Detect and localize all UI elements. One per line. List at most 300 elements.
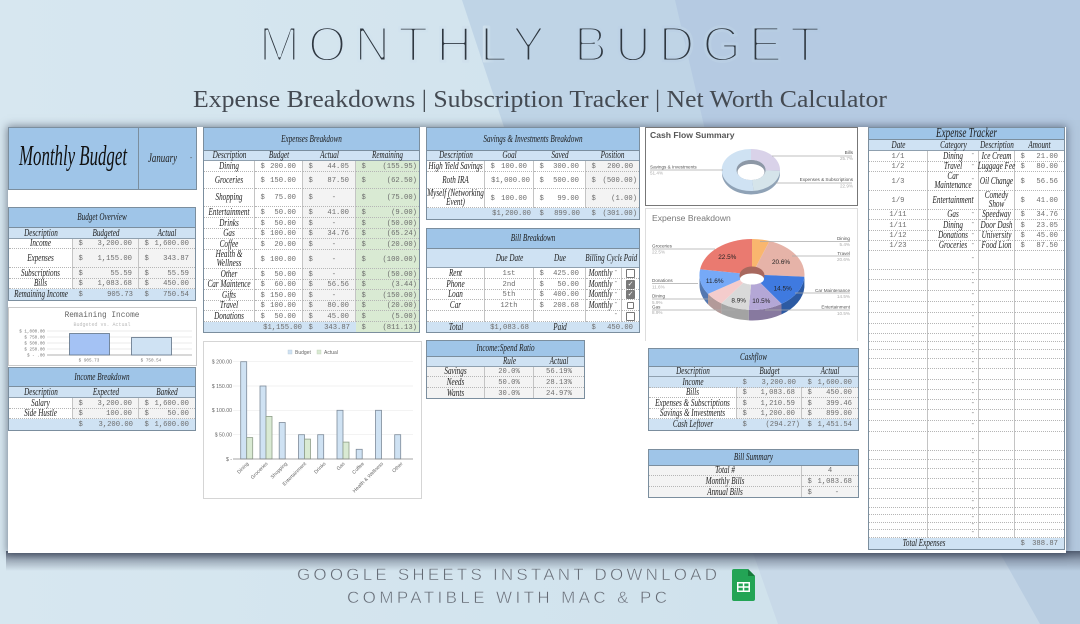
chart: expense breakdown pie: Dining (652, 294, 665, 298)
panel: bill breakdown table: 1st (503, 270, 515, 278)
panel: savings and investments table: Myself (Networking (427, 187, 484, 199)
panel: expenses breakdown table: 343.87 (324, 324, 350, 332)
panel: budget overview table: Income (30, 237, 51, 249)
panel: expenses breakdown table: $1,155.00 (263, 324, 302, 332)
panel: income breakdown table: $ (144, 400, 149, 408)
chart: remaining income: $ - .00 (27, 354, 45, 358)
panel: budget overview table: $ (144, 254, 149, 262)
chart: expense breakdown pie: Entertainment (821, 304, 851, 310)
panel: bill breakdown table: 425.00 (553, 270, 579, 278)
panel: expense tracker table: University (982, 229, 1011, 241)
panel: expenses breakdown table: Wellness (217, 257, 241, 269)
panel: expenses breakdown table: - (332, 270, 336, 278)
panel: expenses breakdown table: (155.95) (382, 162, 417, 170)
chart: expense breakdown pie: Expense Breakdown (652, 213, 731, 223)
panel: expense tracker table: Ice Cream (982, 150, 1011, 162)
panel: expense tracker table: 80.00 (1036, 163, 1058, 171)
panel: expenses breakdown table: Car Maintence (207, 278, 251, 290)
panel: expenses breakdown table: Donations (214, 310, 244, 322)
panel: savings and investments table: Savings & Investments Breakdown (483, 132, 583, 144)
panel: expenses breakdown table: 150.00 (270, 176, 296, 184)
bottom shadow band (6, 551, 1080, 571)
chart: expense breakdown pie: Car Maintenance (815, 288, 850, 293)
panel: savings and investments table: (301.00) (603, 210, 637, 218)
panel: expenses breakdown table: 50.00 (274, 208, 296, 216)
panel: cashflow table: (294.27) (765, 421, 800, 429)
panel: expenses breakdown table: $ (308, 302, 313, 310)
panel: expenses breakdown table: (75.00) (387, 194, 417, 202)
panel: savings and investments table: 200.00 (607, 162, 633, 170)
chart: expense breakdown pie: Travel (837, 251, 850, 256)
panel: savings and investments table: $ (592, 176, 596, 184)
panel: cashflow table: 1,451.54 (817, 421, 852, 429)
panel: income breakdown table: $ (78, 410, 83, 418)
panel: cashflow table: $ (742, 400, 747, 408)
panel: expense tracker table: Description (980, 138, 1014, 150)
chart: expense breakdown pie (645, 208, 858, 341)
panel: expenses breakdown table: (150.00) (382, 292, 417, 300)
panel: expenses breakdown table: $ (308, 208, 313, 216)
chart: cash flow summary donut: 25.7% (840, 156, 853, 161)
chart: expense breakdown pie: 11.6% (706, 278, 724, 285)
panel: expenses breakdown table: $ (362, 162, 366, 170)
panel: budget overview table: $ (144, 291, 149, 299)
panel: bill breakdown table: 208.68 (553, 302, 579, 310)
legend: Actual (324, 350, 338, 356)
panel: expenses breakdown table: 56.56 (327, 281, 349, 289)
panel: bill breakdown table: ✓ (628, 280, 633, 288)
panel: bill breakdown table: $ (540, 302, 544, 310)
panel: cashflow table: 3,200.00 (761, 378, 796, 386)
panel: expenses breakdown table: - (332, 240, 336, 248)
panel: income breakdown table: $ (144, 421, 149, 429)
panel: expense tracker table: 1/9 (892, 196, 904, 204)
panel: bill breakdown table: Paid (553, 320, 567, 332)
chart: budget vs actual bars: Groceries (250, 461, 270, 481)
panel: bill breakdown table: Car (450, 298, 461, 310)
panel: expenses breakdown table: 87.50 (327, 176, 349, 184)
panel: expenses breakdown table: $ (362, 220, 366, 228)
panel: monthly budget banner (8, 127, 197, 190)
chart: expense breakdown pie: 14.5% (837, 294, 850, 299)
panel: budget overview table: $ (78, 254, 83, 262)
panel: budget overview table: 1,600.00 (154, 240, 189, 248)
panel: expenses breakdown table: $ (362, 240, 366, 248)
panel: expense tracker table: 87.50 (1036, 242, 1058, 250)
panel: budget overview table: 55.59 (167, 270, 189, 278)
panel: budget overview table: Remaining Income (14, 288, 68, 300)
panel: expenses breakdown table: $ (308, 194, 313, 202)
panel: savings and investments table: 899.00 (554, 210, 580, 218)
panel: expenses breakdown table: 100.00 (270, 256, 296, 264)
panel: cashflow table: $ (742, 421, 747, 429)
panel: budget overview table: Budget Overview (77, 211, 127, 223)
panel: expense tracker table: 1/1 (892, 152, 904, 160)
chart: remaining income (8, 307, 197, 366)
panel: income breakdown table: Expected (93, 386, 119, 398)
panel: expenses breakdown table: $ (260, 230, 265, 238)
panel: income breakdown table: 3,200.00 (97, 400, 132, 408)
panel: budget overview table: $ (144, 270, 149, 278)
chart: budget vs actual bars: Dining (236, 461, 251, 475)
panel: income spend ratio table: 24.97% (546, 390, 572, 398)
panel: expenses breakdown table: - (332, 220, 336, 228)
panel: cashflow table: 1,600.00 (817, 378, 852, 386)
panel: bill breakdown table: $ (592, 324, 596, 332)
chart: expense breakdown pie: 5.4% (840, 242, 850, 247)
chart: cash flow summary donut (645, 127, 858, 206)
panel: savings and investments table: High Yield Savings (428, 160, 483, 172)
panel: expenses breakdown table: Actual (320, 149, 339, 161)
panel: income breakdown table: 50.00 (167, 410, 189, 418)
panel: savings and investments table: 500.00 (553, 176, 579, 184)
panel: expenses breakdown table: $ (260, 312, 265, 320)
panel: cashflow table: $ (808, 421, 812, 429)
panel: expenses breakdown table: Drinks (219, 216, 239, 228)
panel: budget overview table: Subscriptions (21, 266, 60, 278)
chart: expense breakdown pie: 10.5% (837, 311, 850, 316)
panel: expenses breakdown table: $ (260, 194, 265, 202)
chart: cash flow summary donut: 51.4% (650, 170, 663, 176)
panel: income breakdown table: $ (78, 421, 83, 429)
panel: cashflow table: $ (742, 389, 747, 397)
panel: expenses breakdown table: 200.00 (270, 162, 296, 170)
panel: expenses breakdown table: $ (362, 176, 366, 184)
chart: cash flow summary donut: Expenses & Subscriptions (800, 177, 854, 182)
panel: expenses breakdown table: (3.44) (391, 281, 417, 289)
panel: bill breakdown table: Rent (449, 266, 462, 278)
panel: expenses breakdown table: $ (260, 176, 265, 184)
panel: expenses breakdown table: 50.00 (274, 220, 296, 228)
panel: income breakdown table: Income Breakdown (74, 370, 130, 382)
panel: expense tracker table: $ (1020, 232, 1025, 240)
panel: expenses breakdown table: $ (308, 162, 313, 170)
panel: budget overview table: $ (144, 280, 149, 288)
chart: expense breakdown pie: 10.5% (752, 298, 771, 305)
panel: expenses breakdown table: 50.00 (274, 270, 296, 278)
panel: expenses breakdown table: (20.00) (387, 302, 417, 310)
spreadsheet sheet background (8, 127, 1066, 553)
panel: savings and investments table: $ (490, 162, 495, 170)
panel: income breakdown table: 100.00 (106, 410, 132, 418)
panel: expenses breakdown table: (100.00) (382, 256, 417, 264)
panel: budget overview table: $ (78, 270, 83, 278)
panel: expenses breakdown table: (9.00) (391, 208, 417, 216)
panel: savings and investments table: Description (439, 149, 473, 161)
panel: expense tracker table: $ (1020, 540, 1025, 548)
panel: expense tracker table: $ (1020, 196, 1025, 204)
panel: income breakdown table: Salary (31, 396, 50, 408)
panel: expenses breakdown table: (50.00) (387, 220, 417, 228)
panel: expenses breakdown table: $ (260, 292, 265, 300)
chart: expense breakdown pie: Dining (837, 236, 850, 241)
panel: savings and investments table: $1,000.00 (491, 176, 530, 184)
chart: budget vs actual bars: Gas (336, 461, 347, 472)
panel: expense tracker table: Dining (943, 150, 963, 162)
panel: expenses breakdown table: 41.00 (327, 208, 349, 216)
pie slices (700, 239, 805, 310)
panel: cashflow table: $ (808, 400, 812, 408)
panel: expense tracker table: 1/23 (889, 242, 907, 250)
chart: remaining income: $ 250.00 (24, 348, 45, 352)
chart: budget vs actual bars: Drinks (313, 461, 328, 475)
panel: budget overview table: 1,083.68 (97, 280, 132, 288)
panel: expense tracker table: 21.00 (1036, 152, 1058, 160)
panel: savings and investments table: 300.00 (553, 162, 579, 170)
panel: expense tracker table: Total Expenses (903, 537, 945, 549)
panel: bill breakdown table: ✓ (628, 290, 633, 298)
panel: expenses breakdown table: Groceries (215, 174, 243, 186)
panel: expenses breakdown table: (65.24) (387, 230, 417, 238)
panel: expenses breakdown table: $ (362, 230, 366, 238)
panel: expenses breakdown table: $ (362, 312, 366, 320)
panel: savings and investments table: Saved (551, 149, 569, 161)
chart: budget vs actual bars (203, 341, 422, 499)
panel: bill breakdown table: Phone (446, 278, 465, 290)
panel: savings and investments table: $ (490, 194, 495, 202)
chart: expense breakdown pie: 8.9% (731, 298, 746, 305)
panel: expense tracker table: 1/3 (892, 178, 904, 186)
panel: expenses breakdown table: (50.00) (387, 270, 417, 278)
chart: remaining income: $ 500.00 (24, 342, 45, 346)
panel: expenses breakdown table: 100.00 (270, 230, 296, 238)
panel: cashflow table: Income (682, 376, 704, 388)
chart: budget vs actual bars: $ 100.00 (212, 408, 232, 414)
panel: expenses breakdown table: $ (308, 240, 313, 248)
panel: bill breakdown table: 50.00 (557, 280, 579, 288)
panel: expenses breakdown table: Gas (223, 227, 235, 239)
panel: expense tracker table: 56.56 (1036, 178, 1058, 186)
panel: expense tracker table: Speedway (982, 208, 1011, 220)
panel: income spend ratio table: Needs (447, 376, 464, 388)
panel: cashflow table: 399.46 (826, 400, 852, 408)
panel: income spend ratio table: Actual (550, 355, 568, 367)
panel: income spend ratio table: Wants (447, 386, 464, 398)
panel: expenses breakdown table: Other (221, 268, 237, 280)
panel: expenses breakdown table: Entertainment (209, 206, 249, 218)
footer text (297, 565, 717, 607)
chart: remaining income: $ 1,000.00 (19, 330, 45, 334)
panel: expense tracker table: $ (1020, 163, 1025, 171)
panel: expense tracker table: Category (940, 138, 967, 150)
panel: bill summary table: Bill Summary (734, 451, 773, 463)
footer text: GOOGLE SHEETS INSTANT DOWNLOAD (297, 565, 717, 584)
panel: bill breakdown table: 400.00 (553, 291, 579, 299)
panel: expenses breakdown table: Coffee (220, 238, 238, 250)
chart: expense breakdown pie: Gas (652, 304, 661, 310)
panel: expense tracker table: Donations (938, 229, 968, 241)
panel: expense tracker table: 23.05 (1036, 222, 1058, 230)
panel: income breakdown table: $ (144, 410, 149, 418)
chart: remaining income: $ 750.54 (141, 358, 162, 364)
chart: expense breakdown pie: 22.5% (718, 254, 737, 261)
panel: bill summary table: Annual Bills (707, 486, 743, 498)
panel: bill breakdown table: Due Date (496, 252, 523, 264)
chart: expense breakdown pie: 11.6% (652, 284, 665, 290)
panel: cashflow table: 1,083.68 (760, 389, 795, 397)
legend: Budget (295, 350, 311, 356)
chart: expense breakdown pie: Donations (652, 278, 673, 283)
panel: savings and investments table: Event) (446, 196, 465, 208)
chart: remaining income: Remaining Income (65, 312, 140, 320)
chart: remaining income: $ 905.73 (79, 358, 100, 364)
panel: savings and investments table: $ (592, 162, 596, 170)
footer text: COMPATIBLE WITH MAC & PC (347, 588, 667, 607)
panel: expense tracker table: 1/11 (889, 211, 907, 219)
panel: expenses breakdown table (203, 127, 420, 333)
panel: expense tracker table: Gas (947, 208, 959, 220)
panel: expenses breakdown table: $ (362, 281, 366, 289)
panel: expenses breakdown table: $ (260, 281, 265, 289)
panel: expense tracker table: Dining (943, 218, 963, 230)
icon: google sheets (732, 569, 755, 601)
panel: budget overview table: Actual (158, 226, 176, 238)
panel: budget overview table: $ (78, 240, 83, 248)
panel: income breakdown table: Description (24, 386, 58, 398)
chart: budget vs actual bars: $ 50.00 (215, 432, 232, 438)
panel: bill breakdown table: 5th (503, 291, 515, 299)
chart: remaining income: $ 750.00 (24, 336, 45, 340)
panel: expenses breakdown table: 100.00 (270, 302, 296, 310)
panel: cashflow table: Bills (686, 386, 699, 398)
panel: expenses breakdown table: - (332, 256, 336, 264)
panel: income spend ratio table: Savings (444, 365, 467, 377)
panel: expenses breakdown table: $ (308, 270, 313, 278)
panel: expense tracker table: Travel (944, 160, 962, 172)
panel: expense tracker table: Date (892, 138, 905, 150)
legend (288, 350, 338, 356)
panel: bill breakdown table: Billing Cycle (585, 252, 623, 264)
panel: bill breakdown table: Monthly (589, 266, 612, 278)
panel: expenses breakdown table: 150.00 (270, 292, 296, 300)
panel: budget overview table: $ (144, 240, 149, 248)
panel: expense tracker table: Oil Change (980, 174, 1013, 186)
panel: expense tracker table: Amount (1028, 138, 1051, 150)
panel: expenses breakdown table: $ (260, 220, 265, 228)
panel: expense tracker table: Groceries (939, 239, 967, 251)
panel: budget overview table (8, 207, 196, 301)
panel: expenses breakdown table: Travel (220, 299, 238, 311)
panel: bill summary table: 4 (828, 467, 832, 475)
panel: expense tracker table: Comedy (985, 189, 1008, 201)
panel: bill breakdown table: $ (540, 280, 544, 288)
panel: income breakdown table (8, 367, 196, 431)
panel: expenses breakdown table: (62.50) (387, 176, 417, 184)
panel: income breakdown table: 3,200.00 (98, 421, 133, 429)
panel: income spend ratio table: 28.13% (546, 378, 572, 386)
panel: expenses breakdown table: $ (260, 240, 265, 248)
panel: bill breakdown table: 450.00 (607, 324, 633, 332)
panel: expenses breakdown table: 60.00 (274, 281, 296, 289)
panel: expenses breakdown table: 34.76 (327, 230, 349, 238)
chart: budget vs actual bars: Health & Wellness (352, 461, 385, 494)
panel: expenses breakdown table: - (332, 194, 336, 202)
panel: savings and investments table: $ (540, 176, 544, 184)
panel: bill breakdown table: Loan (448, 288, 463, 300)
subtitle: Expense Breakdowns | Subscription Tracker | Net Worth Calculator (193, 87, 887, 113)
panel: expenses breakdown table: $ (308, 220, 313, 228)
panel: expense tracker table: 388.87 (1032, 540, 1058, 548)
panel: budget overview table: $ (78, 291, 83, 299)
panel: income spend ratio table (426, 340, 585, 399)
panel: expense tracker table: 45.00 (1036, 232, 1058, 240)
panel: expenses breakdown table: $ (308, 256, 313, 264)
panel: income breakdown table: Banked (156, 386, 178, 398)
chart: cash flow summary donut: Bills (845, 150, 854, 155)
panel: expense tracker table: Entertainment (933, 194, 973, 206)
panel: savings and investments table: Position (601, 149, 624, 161)
panel: savings and investments table: 100.00 (501, 162, 527, 170)
panel: cashflow table: Expenses & Subscriptions (655, 396, 730, 408)
chart: expense breakdown pie: Groceries (652, 244, 673, 248)
chart: budget vs actual bars: Coffee (351, 461, 366, 476)
panel: expenses breakdown table: Remaining (372, 149, 403, 161)
panel: bill summary table: 1,083.68 (817, 478, 852, 486)
panel: expense tracker table: $ (1020, 242, 1025, 250)
panel: income spend ratio table: 56.19% (546, 368, 572, 376)
panel: expense tracker table: $ (1020, 178, 1025, 186)
panel: expenses breakdown table: $ (308, 230, 313, 238)
panel: bill breakdown table: Due (554, 252, 566, 264)
panel: expenses breakdown table: $ (362, 256, 366, 264)
panel: bill breakdown table: 2nd (503, 280, 515, 288)
panel: expenses breakdown table: $ (260, 256, 265, 264)
panel: expenses breakdown table: $ (308, 324, 313, 332)
panel: expenses breakdown table: $ (308, 176, 313, 184)
panel: income spend ratio table: 50.0% (498, 378, 520, 386)
chart: budget vs actual bars: $ 150.00 (212, 384, 232, 390)
panel: cashflow table: Budget (759, 365, 780, 377)
panel: cashflow table: Cashflow (740, 351, 767, 363)
panel: savings and investments table: Roth IRA (442, 174, 469, 186)
panel: cashflow table: 899.00 (826, 410, 852, 418)
panel: bill breakdown table: $ (540, 291, 544, 299)
panel: expenses breakdown table: 20.00 (274, 240, 296, 248)
panel: savings and investments table: $1,200.00 (492, 210, 531, 218)
panel: cashflow table: Cash Leftover (673, 418, 713, 430)
chart: budget vs actual bars: $ - (226, 457, 232, 463)
panel: income spend ratio table: 30.0% (498, 390, 520, 398)
panel: bill breakdown table: Monthly (589, 298, 612, 310)
panel: income breakdown table: 1,600.00 (154, 400, 189, 408)
panel: expense tracker table: 34.76 (1036, 211, 1058, 219)
chart: expense breakdown pie: 14.5% (774, 286, 792, 292)
panel: income spend ratio table: 20.0% (498, 368, 520, 376)
panel: savings and investments table: (500.00) (603, 176, 637, 184)
panel: bill breakdown table: Paid (624, 252, 637, 264)
panel: bill breakdown table: Bill Breakdown (511, 232, 555, 244)
panel: expense tracker table: Luggage Fee (978, 160, 1015, 172)
panel: expense tracker table: Car (947, 170, 959, 182)
panel: bill summary table: $ (808, 478, 812, 486)
panel: expenses breakdown table: Description (213, 149, 246, 161)
panel: savings and investments table: $ (592, 194, 596, 202)
panel: income spend ratio table: Income:Spend Ratio (476, 342, 535, 354)
panel: expenses breakdown table: Budget (269, 149, 289, 161)
panel: budget overview table: 905.73 (107, 291, 133, 299)
panel: expenses breakdown table: 80.00 (327, 302, 349, 310)
panel: expenses breakdown table: $ (362, 208, 366, 216)
panel: cashflow table: $ (742, 410, 747, 418)
panel: cashflow table: $ (808, 389, 812, 397)
panel: expense tracker table: Food Lion (981, 239, 1012, 251)
panel: expenses breakdown table: 45.00 (327, 312, 349, 320)
panel: income breakdown table: Side Hustle (24, 407, 57, 419)
panel: savings and investments table: $ (592, 210, 596, 218)
panel: savings and investments table: 99.00 (557, 194, 579, 202)
panel: bill summary table: Total # (715, 464, 735, 476)
panel: expenses breakdown table: $ (260, 270, 265, 278)
